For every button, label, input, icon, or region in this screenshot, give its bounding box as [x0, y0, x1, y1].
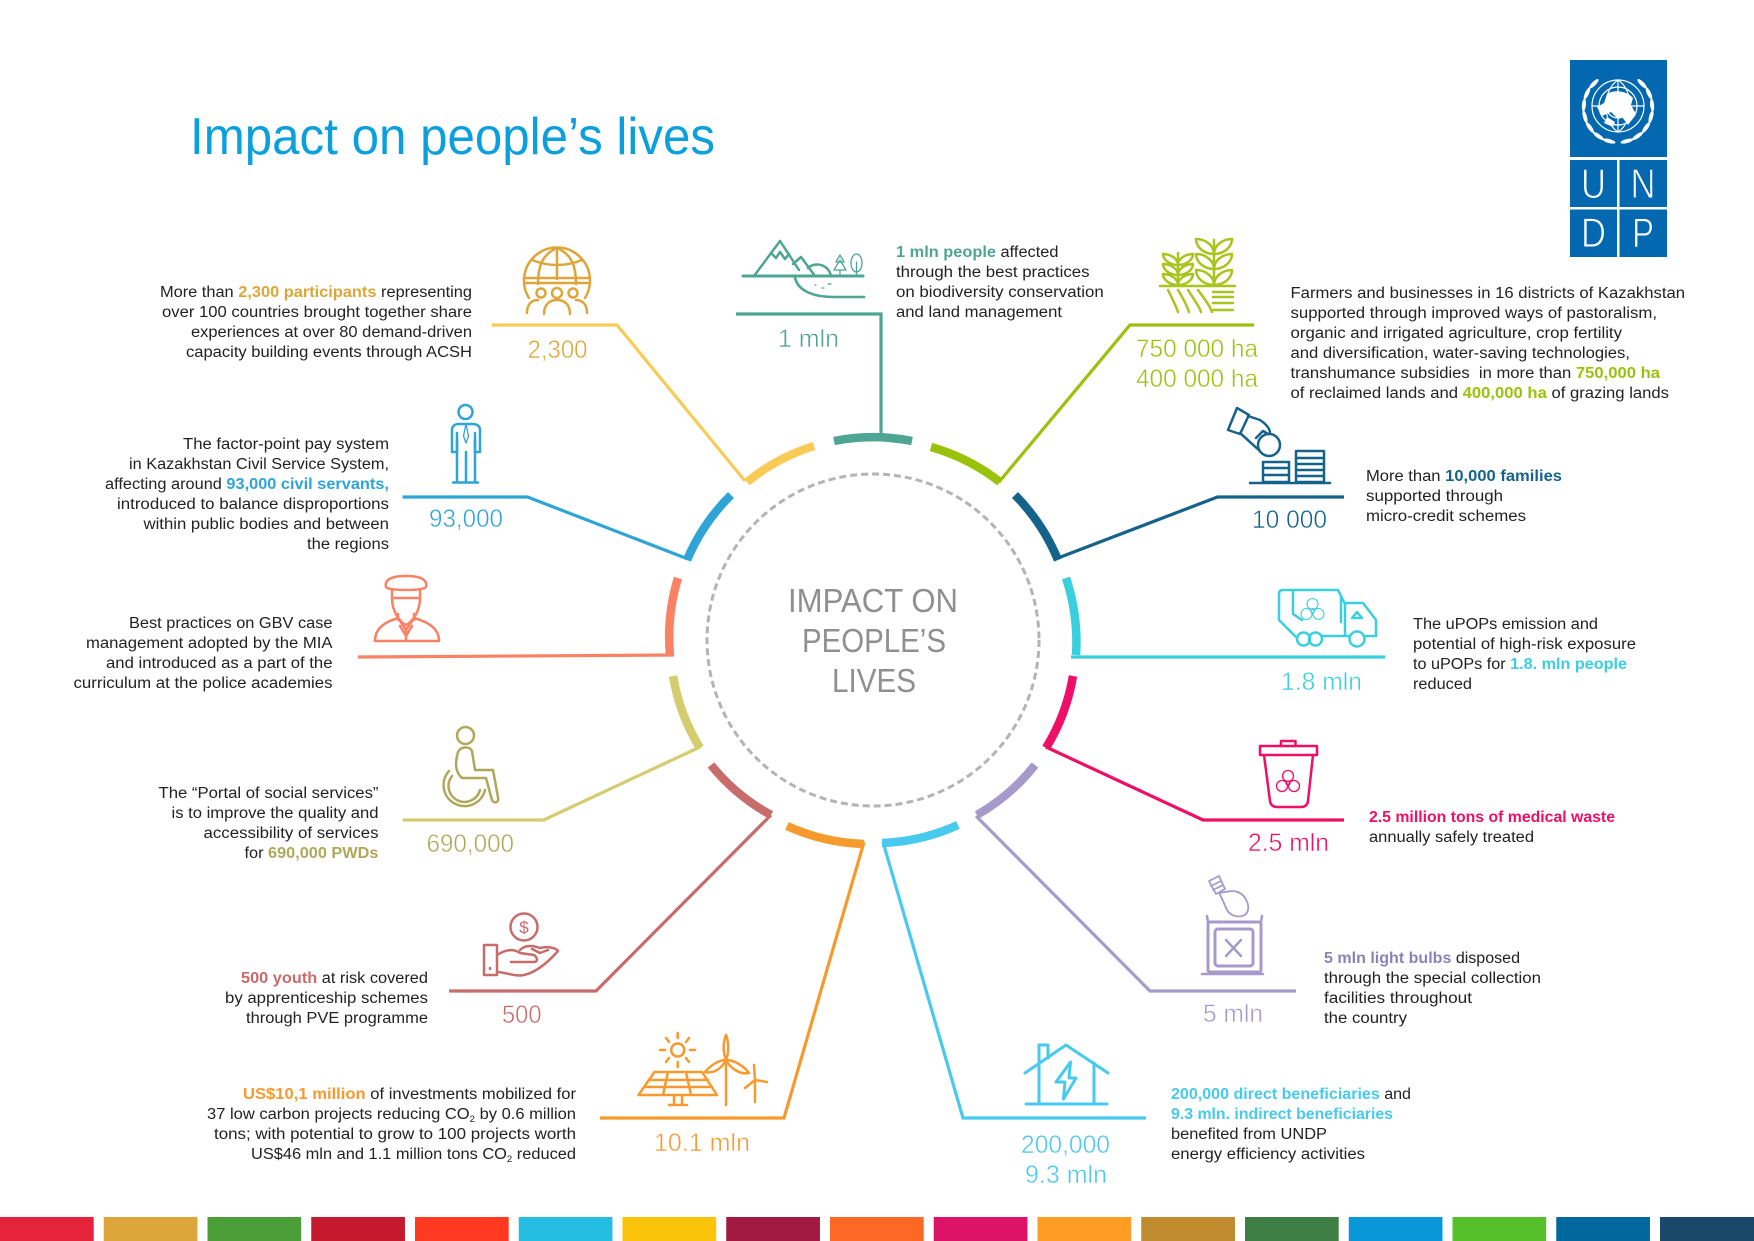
description: by apprenticeship schemes [225, 990, 428, 1007]
icon: solar panel and wind turbines [638, 1033, 767, 1105]
description: and diversification, water-saving technologies, [1290, 345, 1630, 362]
logo: UNDP: D [1581, 209, 1606, 256]
value: 690,000 [426, 830, 514, 858]
description: management adopted by the MIA [86, 635, 333, 652]
central dashed circle [707, 474, 1039, 806]
value: 1 mln [778, 325, 839, 353]
icon label: dollar sign: $ [519, 918, 529, 937]
description: The uPOPs emission and [1413, 616, 1598, 633]
value: 93,000 [429, 505, 503, 533]
connector: rose [449, 765, 771, 991]
values: 400 000 ha [1136, 365, 1258, 393]
description: supported through [1366, 488, 1503, 505]
description: US$46 mln and 1.1 million tons CO [251, 1146, 493, 1163]
description: 2.5 million tons of medical waste [1369, 809, 1615, 826]
icon: police officer [375, 576, 439, 641]
connector: lavender [976, 765, 1296, 991]
icon: mountains and lake [743, 241, 864, 297]
description: through PVE programme [246, 1010, 428, 1027]
description: benefited from UNDP [1171, 1126, 1327, 1143]
central heading: LIVES [832, 662, 916, 699]
description: More than 2,300 participants representing [160, 284, 472, 301]
description: energy efficiency activities [1171, 1146, 1365, 1163]
panel: light bulbs 5 mln [976, 765, 1541, 1028]
description: within public bodies and between [142, 516, 389, 533]
description: Farmers and businesses in 16 districts of Kazakhstan [1290, 285, 1685, 302]
description: reduced [512, 1146, 576, 1163]
description [105, 436, 389, 553]
value: 5 mln [1203, 1000, 1263, 1028]
panel: portal 690,000 [158, 676, 700, 862]
panel: civil service 93,000 [105, 405, 731, 560]
icon: house with bolt [1025, 1045, 1108, 1104]
description: 37 low carbon projects reducing CO [207, 1106, 453, 1123]
value: 2.5 mln [1248, 829, 1329, 857]
connector: cyan [1066, 578, 1385, 657]
icon: globe with people [524, 248, 590, 314]
panel: biodiversity 1 mln [736, 241, 1104, 441]
connector: sky [882, 825, 1146, 1118]
panel: uPOPs 1.8 mln [1066, 578, 1636, 696]
icon: hand dropping coin [1228, 408, 1330, 483]
colour strip: SDG bars [0, 1217, 1754, 1241]
panel: medical waste 2.5 mln [1046, 676, 1615, 857]
description [225, 970, 428, 1027]
icon: wheelchair user [444, 727, 498, 806]
description: the country [1324, 1010, 1407, 1027]
connector: khaki [402, 676, 700, 820]
description: on biodiversity conservation [896, 284, 1104, 301]
icon: bulb and disposal box [1202, 876, 1263, 974]
description: to uPOPs for 1.8. mln people [1413, 656, 1627, 673]
panel: participants 2,300 [160, 248, 814, 482]
logo: UNDP: N [1630, 160, 1656, 207]
description: transhumance subsidies in more than 750,000 ha [1290, 365, 1660, 382]
description [1413, 616, 1636, 693]
icon: hand holding dollar coin [484, 914, 558, 975]
description: 5 mln light bulbs disposed [1324, 950, 1520, 967]
description: by 0.6 million [475, 1106, 576, 1123]
values: 9.3 mln [1025, 1161, 1107, 1189]
panel: low carbon 10.1 mln [207, 826, 864, 1164]
icon: biohazard bin [1260, 741, 1317, 807]
description [74, 615, 333, 692]
description: More than 10,000 families [1366, 468, 1562, 485]
description: reduced [1413, 676, 1472, 693]
values [1021, 1131, 1110, 1189]
panel: farmers 750 000 ha [931, 239, 1685, 482]
connector: green [931, 325, 1254, 482]
connector: yellow [492, 325, 814, 482]
value: 10.1 mln [654, 1129, 750, 1157]
icon: wheat and field [1160, 239, 1235, 312]
description: capacity building events through ACSH [186, 344, 472, 361]
description: the regions [307, 536, 389, 553]
description [207, 1086, 576, 1164]
connector: pink [1046, 676, 1344, 820]
logo: UNDP: U [1581, 160, 1606, 207]
description: organic and irrigated agriculture, crop fertility [1290, 325, 1622, 342]
description [158, 785, 379, 862]
description: experiences at over 80 demand-driven [191, 324, 472, 341]
central heading: PEOPLE’S [802, 622, 946, 659]
description [160, 284, 472, 361]
description [1369, 809, 1615, 846]
description: 2 [470, 1114, 475, 1124]
description: introduced to balance disproportions [117, 496, 389, 513]
values: 750 000 ha [1136, 335, 1258, 363]
connector: orange [600, 826, 864, 1118]
description: annually safely treated [1369, 829, 1534, 846]
description [1290, 285, 1685, 402]
description: tons; with potential to grow to 100 projects worth [214, 1126, 576, 1143]
description: US$10,1 million of investments mobilized for [243, 1086, 576, 1103]
icon: biohazard truck [1279, 590, 1376, 646]
description: potential of high-risk exposure [1413, 636, 1636, 653]
description: 200,000 direct beneficiaries and [1171, 1086, 1411, 1103]
description [1171, 1086, 1411, 1163]
panel: families 10 000 [1015, 408, 1562, 560]
value: 2,300 [528, 336, 588, 364]
description: 1 mln people affected [896, 244, 1058, 261]
description: curriculum at the police academies [74, 675, 333, 692]
description: of reclaimed lands and 400,000 ha of grazing lands [1290, 385, 1669, 402]
value: 1.8 mln [1281, 668, 1362, 696]
description: for 690,000 PWDs [244, 845, 378, 862]
description [896, 244, 1104, 321]
description: and introduced as a part of the [106, 655, 332, 672]
description: and land management [896, 304, 1063, 321]
icon: civil servant [452, 405, 480, 482]
title: Impact on people’s lives [190, 108, 715, 166]
values: 200,000 [1021, 1131, 1110, 1159]
logo: UNDP: P [1632, 209, 1654, 256]
central heading [788, 582, 958, 699]
description: through the special collection [1324, 970, 1541, 987]
description: in Kazakhstan Civil Service System, [129, 456, 389, 473]
description: 2 [507, 1154, 512, 1164]
description: through the best practices [896, 264, 1090, 281]
connector: salmon [358, 578, 678, 657]
description: affecting around 93,000 civil servants, [105, 476, 389, 493]
description: facilities throughout [1324, 990, 1473, 1007]
description: 9.3 mln. indirect beneficiaries [1171, 1106, 1393, 1123]
description: micro-credit schemes [1366, 508, 1526, 525]
description: supported through improved ways of pastoralism, [1290, 305, 1657, 322]
panel: GBV case management [74, 576, 678, 692]
description: accessibility of services [204, 825, 379, 842]
description [1366, 468, 1562, 525]
values [1136, 335, 1258, 393]
connector: navy [1015, 495, 1344, 560]
connector: teal [736, 314, 912, 441]
description: over 100 countries brought together share [162, 304, 472, 321]
description: is to improve the quality and [172, 805, 378, 822]
connector: blue [402, 495, 731, 560]
central heading: IMPACT ON [788, 582, 958, 619]
description: The factor-point pay system [183, 436, 389, 453]
description: The “Portal of social services” [158, 785, 378, 802]
description: Best practices on GBV case [129, 615, 332, 632]
value: 500 [502, 1001, 542, 1029]
panel: youth 500 [225, 765, 771, 1029]
value: 10 000 [1252, 506, 1327, 534]
logo: UNDP [1570, 60, 1667, 257]
description [1324, 950, 1541, 1027]
description: 500 youth at risk covered [241, 970, 428, 987]
panel: energy efficiency 200,000 [882, 825, 1411, 1189]
